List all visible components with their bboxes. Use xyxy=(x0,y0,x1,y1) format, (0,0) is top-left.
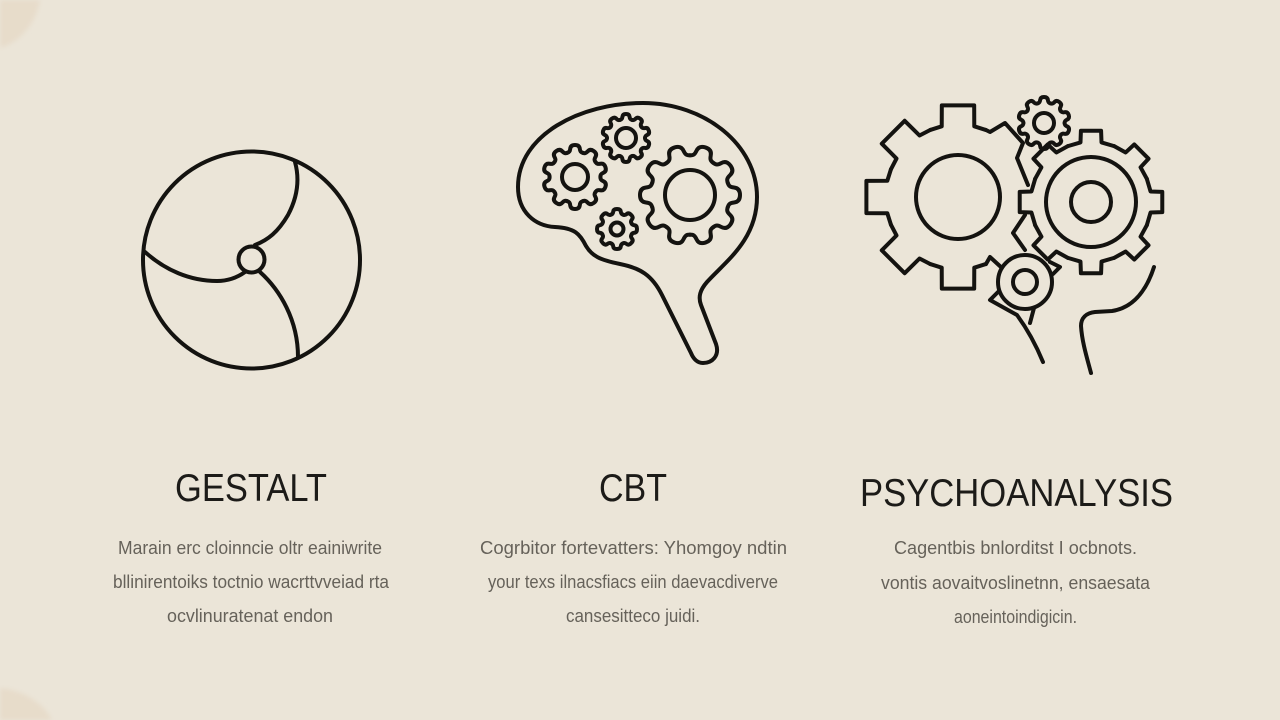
icon: circle with inner arcs xyxy=(143,152,360,368)
panel: Psychoanalysis xyxy=(860,97,1173,627)
text block: CBT description: Cogrbitor fortevatters: Yhomgoy ndtin xyxy=(480,538,787,558)
panel: CBT xyxy=(480,103,787,626)
text block: CBT description: cansesitteco juidi. xyxy=(566,606,700,626)
text block: Psychoanalysis description: aoneintoindigicin. xyxy=(954,607,1077,627)
heading: CBT: CBT xyxy=(599,467,667,510)
text block: CBT description xyxy=(480,538,787,626)
text block: Gestalt description: bllinirentoiks toctnio wacrttvveiad rta xyxy=(113,572,390,592)
text block: Psychoanalysis description: vontis aovaitvoslinetnn, ensaesata xyxy=(881,573,1151,593)
icon: interlocking gears and head xyxy=(866,97,1162,373)
text block: Gestalt description xyxy=(113,538,390,626)
panel: Gestalt xyxy=(113,152,390,626)
icon: brain with gears xyxy=(518,103,757,363)
text block: CBT description: your texs ilnacsfiacs eiin daevacdiverve xyxy=(488,572,778,592)
text block: Gestalt description: ocvlinuratenat endon xyxy=(167,606,333,626)
heading: Gestalt: GESTALT xyxy=(175,467,327,510)
text block: Psychoanalysis description: Cagentbis bnlorditst I ocbnots. xyxy=(894,538,1137,558)
text block: Psychoanalysis description xyxy=(881,538,1151,627)
text block: Gestalt description: Marain erc cloinncie oltr eainiwrite xyxy=(118,538,382,558)
heading: Psychoanalysis: PSYCHOANALYSIS xyxy=(860,472,1173,515)
